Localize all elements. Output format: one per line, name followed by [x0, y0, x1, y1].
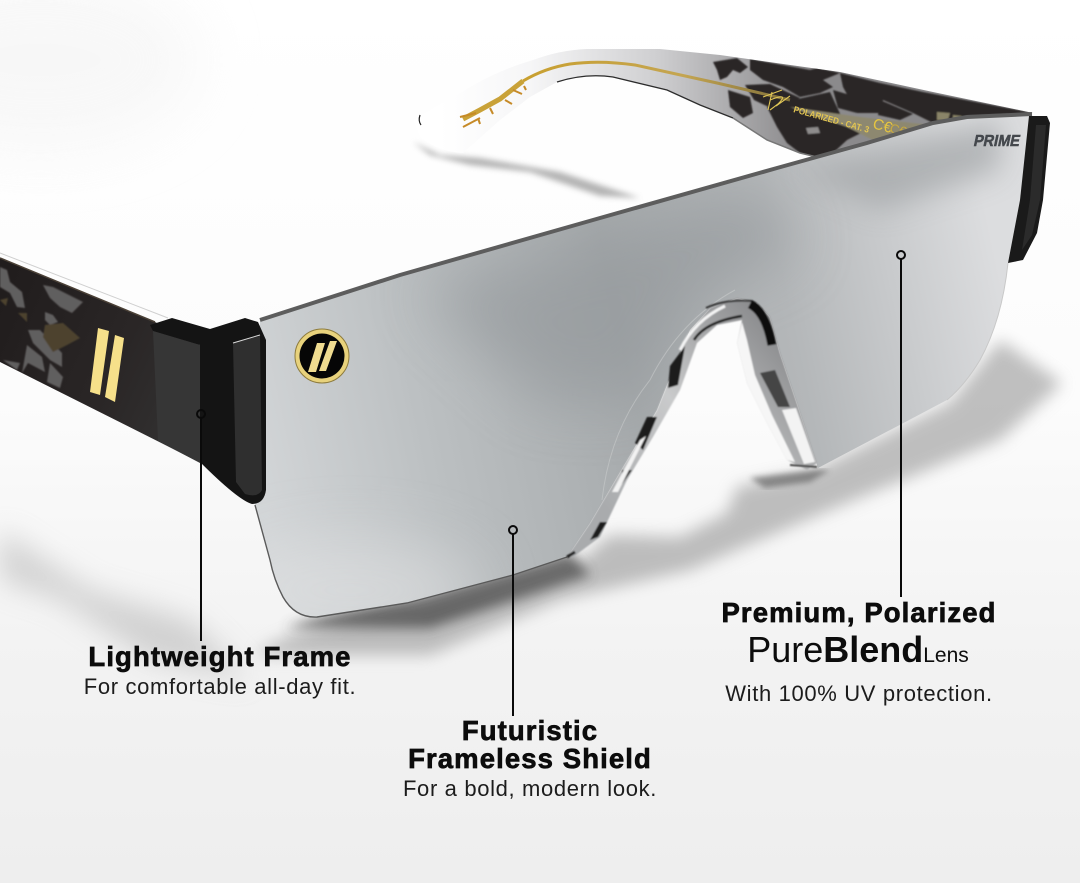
nose piece — [567, 298, 817, 557]
callout: futuristic frameless shield: For a bold, modern look. — [403, 776, 657, 801]
temple arm, far side — [418, 49, 1033, 156]
pointer: frameless shield — [509, 526, 517, 716]
camo pattern — [713, 58, 1033, 157]
lens — [220, 114, 1032, 640]
ground shadows — [0, 0, 1062, 680]
callout: lightweight frame: Lightweight Frame — [88, 641, 352, 672]
temple print: POLARIZED - CAT. 3 — [792, 104, 870, 135]
callout: futuristic frameless shield — [403, 715, 657, 801]
gold bars — [90, 328, 124, 402]
callout: premium polarized lens: PureBlendLens — [747, 629, 969, 670]
callout: lightweight frame: For comfortable all-day fit. — [84, 674, 356, 699]
PRIME mark: PRIME — [972, 132, 1022, 150]
callout: lightweight frame — [84, 641, 356, 699]
temple arm, far side: C€ — [888, 120, 909, 139]
callout: premium polarized lens: Premium, Polarized — [721, 597, 997, 628]
left hinge block — [150, 318, 266, 504]
pointer: polarized lens — [897, 251, 905, 597]
logo badge — [295, 329, 349, 383]
callout: premium polarized lens — [721, 597, 997, 706]
left temple with camo — [0, 258, 205, 465]
callout: premium polarized lens: With 100% UV protection. — [725, 681, 993, 706]
pointer: lightweight frame — [197, 410, 205, 641]
callout: futuristic frameless shield: Frameless Shield — [408, 743, 652, 774]
right hinge block — [1008, 116, 1050, 263]
callout: futuristic frameless shield: Futuristic — [462, 715, 598, 746]
temple arm, far side: C€ — [871, 115, 895, 137]
